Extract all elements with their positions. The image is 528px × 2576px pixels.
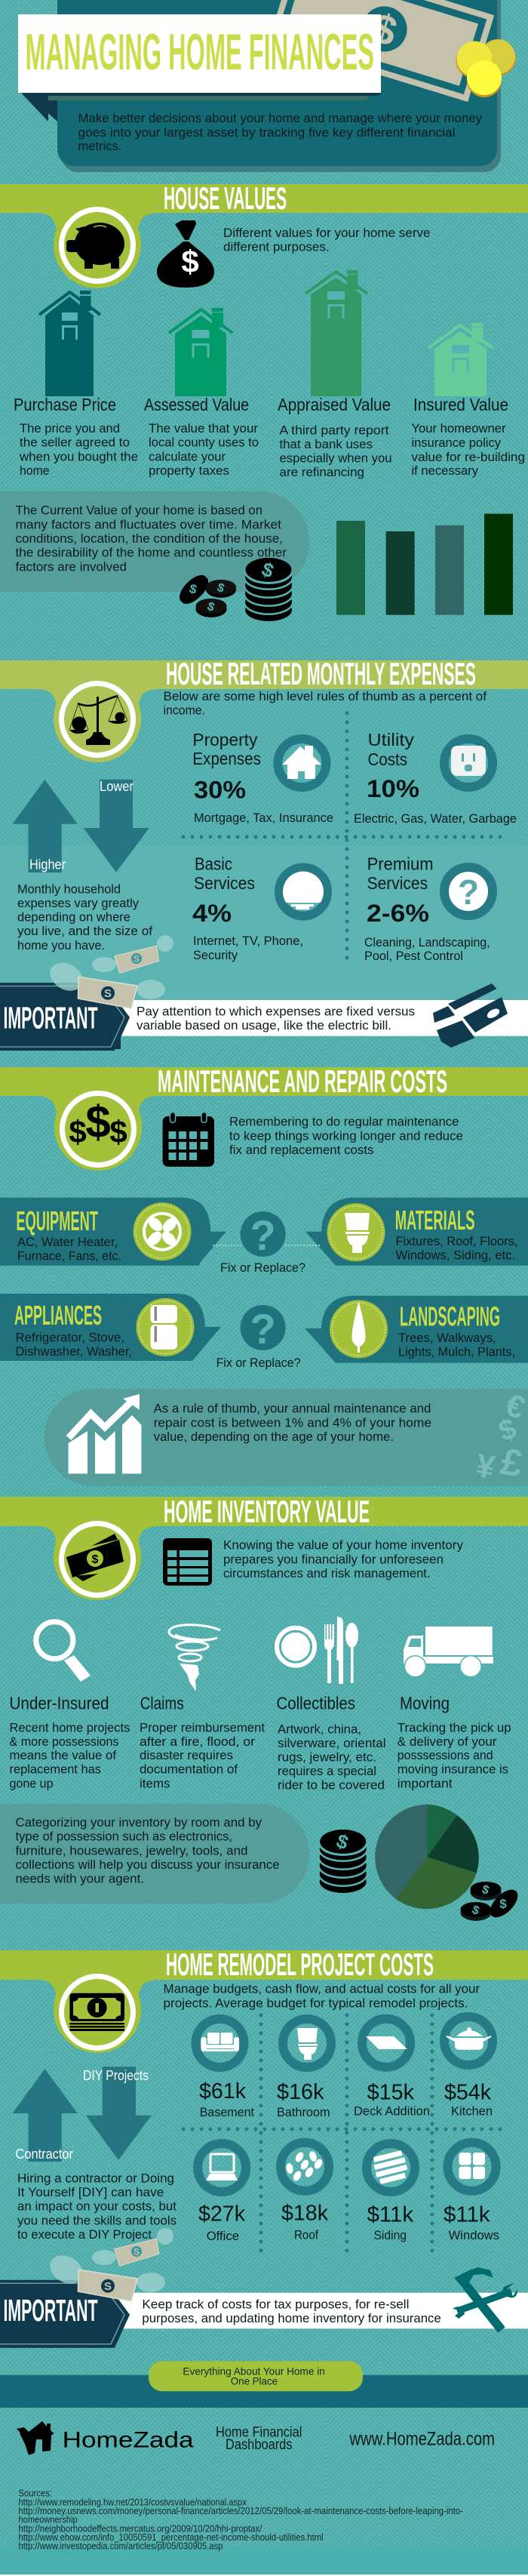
cost: siding: $11k bbox=[367, 2203, 414, 2227]
icon: flying money bbox=[45, 932, 177, 1008]
icon: dollar signs bbox=[69, 1097, 127, 1150]
text: contractor vs diy: to execute a DIY Project bbox=[17, 2227, 152, 2242]
panel: categorizing inventory: needs with your agent. bbox=[15, 1872, 144, 1886]
panel: rule of thumb: As a rule of thumb, your annual maintenance and bbox=[154, 1402, 431, 1416]
callout: important expenses bbox=[0, 983, 528, 1051]
cost: office: $27k bbox=[198, 2202, 245, 2227]
icon: deck bbox=[366, 2036, 407, 2049]
logo: HomeZada bbox=[17, 2421, 194, 2455]
expense: utility: 10% bbox=[367, 775, 419, 802]
icon: growth chart bbox=[69, 1394, 142, 1473]
panel: categorizing inventory: collections will help you discuss your insurance bbox=[15, 1857, 279, 1872]
icon: fan bbox=[133, 1202, 192, 1260]
intro text: inventory: Knowing the value of your home inventory bbox=[223, 1538, 463, 1553]
text: monthly expenses note bbox=[17, 882, 152, 953]
icon: tornado bbox=[169, 1625, 220, 1691]
sources: homeownership bbox=[18, 2515, 78, 2525]
callout: equipment: EQUIPMENT bbox=[16, 1205, 98, 1236]
column labels: inventory bbox=[9, 1693, 450, 1713]
icon: money bag: $ bbox=[181, 244, 199, 279]
icon: question mark: ? bbox=[458, 873, 479, 912]
arrow: higher: Higher bbox=[29, 857, 66, 873]
section band: maintenance bbox=[0, 1063, 528, 1171]
cost: roof: Roof bbox=[294, 2228, 318, 2242]
text: monthly expenses note: expenses vary greatly bbox=[17, 896, 139, 910]
intro text: maintenance: fix and replacement costs bbox=[229, 1143, 374, 1157]
column labels: Insured Value bbox=[413, 395, 508, 414]
icon: cash bbox=[66, 1534, 124, 1581]
column labels bbox=[14, 395, 508, 414]
sources: http://www.ehow.com/info_10050591_percentage-net-income-should-utilities.html bbox=[18, 2532, 324, 2543]
callout: materials: Fixtures, Roof, Floors, bbox=[395, 1234, 517, 1248]
text: moving: important bbox=[398, 1776, 453, 1790]
sources bbox=[18, 2488, 463, 2551]
cost: bathroom: $16k bbox=[277, 2080, 324, 2104]
intro text: inventory bbox=[223, 1538, 463, 1580]
text: contractor vs diy: Hiring a contractor or Doing bbox=[17, 2171, 174, 2186]
header description: goes into your largest asset by tracking five key different financial bbox=[78, 125, 456, 140]
icon: magnifier bbox=[36, 1622, 91, 1682]
text: assessed value bbox=[149, 421, 259, 478]
icon: monitor bbox=[279, 868, 327, 916]
cost: deck addition: $15k bbox=[367, 2081, 414, 2105]
intro text: inventory: circumstances and risk management. bbox=[223, 1566, 430, 1580]
text: assessed value: property taxes bbox=[149, 463, 229, 478]
intro text: remodel: Manage budgets, cash flow, and actual costs for all your bbox=[163, 1982, 480, 1996]
text: monthly expenses note: home you have. bbox=[17, 938, 105, 953]
text: collectibles: Artwork, china, bbox=[278, 1722, 361, 1737]
icon: sofa bbox=[201, 2033, 239, 2051]
panel: current value: many factors and fluctuates over time. Market bbox=[15, 517, 281, 531]
logo: HomeZada: HomeZada bbox=[63, 2428, 194, 2453]
text: purchase price: when you bought the bbox=[19, 450, 138, 464]
icon: wallet bbox=[433, 983, 508, 1048]
icon: flying money: S bbox=[134, 2246, 140, 2257]
text: appraised value: A third party report bbox=[279, 423, 389, 438]
panel: current value bbox=[0, 491, 309, 592]
text: insured value: insurance policy bbox=[412, 435, 501, 450]
text: insured value: Your homeowner bbox=[412, 421, 506, 435]
cost: windows: $11k bbox=[444, 2203, 490, 2227]
callout: important expenses: Pay attention to which expenses are fixed versus bbox=[137, 1005, 415, 1019]
icon: flying money bbox=[45, 2225, 177, 2301]
intro text: house values: Different values for your home serve bbox=[223, 226, 430, 240]
expense: property: Mortgage, Tax, Insurance bbox=[194, 811, 333, 825]
text: contractor vs diy: you need the skills and tools bbox=[17, 2213, 177, 2227]
intro text: expenses bbox=[163, 689, 487, 718]
panel: current value: conditions, location, the condition of the house, bbox=[15, 531, 283, 546]
text: moving: & delivery of your bbox=[398, 1734, 497, 1749]
header description: metrics. bbox=[78, 139, 122, 153]
expense: premium services: 2-6% bbox=[367, 900, 429, 927]
icon: currency symbols: £ bbox=[498, 1440, 526, 1485]
text: under-insured: replacement has bbox=[9, 1762, 101, 1777]
cost: bathroom bbox=[277, 2019, 331, 2119]
title ribbon bbox=[18, 14, 381, 122]
text: under-insured: & more possessions bbox=[9, 1734, 119, 1749]
icon: window panes bbox=[459, 2153, 485, 2179]
panel: rule of thumb: repair cost is between 1% and 4% of your home bbox=[154, 1415, 431, 1430]
text: claims: after a fire, flood, or bbox=[140, 1734, 255, 1749]
expense: property: Expenses bbox=[192, 749, 261, 768]
text: claims: Proper reimbursement bbox=[140, 1720, 265, 1734]
callout: landscaping bbox=[305, 1296, 528, 1363]
cost: windows bbox=[444, 2143, 499, 2242]
arrow: diy projects bbox=[83, 2067, 152, 2160]
icon: spreadsheet bbox=[163, 1538, 212, 1586]
icon: dollar signs: $ bbox=[69, 1114, 87, 1150]
sources: http://money.usnews.com/money/personal-finance/articles/2012/05/29/look-at-maintenance-costs-before-leaping-into- bbox=[18, 2506, 463, 2516]
intro text: expenses: income. bbox=[163, 703, 205, 718]
section band: house values: HOUSE VALUES bbox=[164, 180, 287, 216]
expense: premium services bbox=[364, 854, 493, 963]
text: under-insured: Recent home projects bbox=[9, 1720, 130, 1734]
icon: siding bbox=[372, 2150, 410, 2185]
icon: currency symbols bbox=[473, 1386, 528, 1487]
text: purchase price bbox=[19, 421, 138, 478]
arrow: contractor bbox=[12, 2069, 78, 2162]
callout: important remodel bbox=[0, 2267, 528, 2348]
expense: utility: Utility bbox=[368, 730, 415, 749]
icon: calendar bbox=[163, 1113, 214, 1167]
text: insured value bbox=[412, 421, 525, 478]
text: contractor vs diy bbox=[17, 2171, 177, 2242]
panel: rule of thumb: value, depending on the age of your home. bbox=[154, 1430, 394, 1444]
text: claims: disaster requires bbox=[140, 1748, 233, 1762]
text: moving: posssessions and bbox=[398, 1748, 493, 1762]
intro text: house values bbox=[223, 226, 430, 254]
cost: windows: Windows bbox=[449, 2228, 499, 2242]
text: home financial dashboards: Home Financial bbox=[216, 2425, 302, 2441]
column labels: Purchase Price bbox=[14, 395, 116, 414]
column labels: Assessed Value bbox=[144, 395, 249, 414]
cost: kitchen: Kitchen bbox=[451, 2104, 493, 2119]
callout: appliances: Dishwasher, Washer, bbox=[15, 1344, 132, 1359]
section band: inventory bbox=[0, 1494, 528, 1600]
panel: current value: the desirability of the home and countless other bbox=[15, 546, 287, 560]
callout: equipment: Furnace, Fans, etc. bbox=[17, 1249, 121, 1263]
icon: dollar signs: $ bbox=[109, 1114, 127, 1150]
icon: loose coins: $ bbox=[499, 1897, 507, 1911]
text: moving: Tracking the pick up bbox=[398, 1720, 511, 1734]
icon: laptop bbox=[206, 2154, 238, 2181]
arrow: lower: Lower bbox=[100, 779, 134, 794]
icon: coin stack bbox=[319, 1829, 367, 1893]
expense: basic services: 4% bbox=[192, 900, 232, 927]
panel: categorizing inventory bbox=[0, 1804, 309, 1904]
callout: important expenses: IMPORTANT bbox=[3, 1001, 98, 1036]
icon: shingles bbox=[285, 2150, 324, 2182]
arrow: diy projects: DIY Projects bbox=[83, 2068, 149, 2083]
icon: flying money: S bbox=[134, 954, 140, 965]
text: appraised value bbox=[279, 423, 392, 479]
footer band bbox=[0, 2375, 528, 2408]
arrow: higher bbox=[12, 780, 78, 873]
icon: tableware bbox=[277, 1617, 358, 1684]
icon: question mark bbox=[444, 867, 493, 916]
callout: equipment bbox=[0, 1198, 226, 1266]
text: collectibles: rugs, jewelry, etc. bbox=[278, 1750, 376, 1764]
expense: basic services bbox=[192, 854, 327, 962]
icon: banknote bbox=[269, 0, 494, 102]
intro text: maintenance bbox=[229, 1115, 463, 1157]
icon: piggy bank bbox=[66, 223, 124, 269]
label: fix or replace 1: Fix or Replace? bbox=[220, 1260, 305, 1275]
text: assessed value: calculate your bbox=[149, 450, 226, 464]
icon: coin stack bbox=[244, 557, 293, 621]
icon: loose coins bbox=[175, 571, 236, 617]
house: appraised value bbox=[305, 270, 367, 396]
text: claims: documentation of bbox=[140, 1762, 238, 1777]
panel: rule of thumb bbox=[45, 1386, 528, 1487]
icon: gold coins bbox=[456, 39, 516, 97]
intro text: inventory: prepares you financially for unforeseen bbox=[223, 1552, 444, 1566]
label: fix or replace 2: Fix or Replace? bbox=[216, 1356, 301, 1370]
callout: appliances bbox=[0, 1294, 221, 1361]
text: home financial dashboards: Dashboards bbox=[226, 2437, 293, 2453]
icon: hammer and wrench bbox=[453, 2267, 517, 2330]
icon: toilet bbox=[327, 1203, 385, 1261]
house: purchase price bbox=[39, 291, 100, 396]
cost: siding bbox=[367, 2144, 415, 2242]
icon: flying money: S bbox=[104, 2280, 112, 2293]
panel: current value: The Current Value of your home is based on bbox=[15, 503, 262, 518]
text: monthly expenses note: Monthly household bbox=[17, 882, 121, 896]
intro text: remodel bbox=[163, 1982, 480, 2010]
expense: basic services: Basic bbox=[195, 854, 232, 874]
callout: landscaping: Trees, Walkways, bbox=[398, 1331, 496, 1345]
cost: kitchen bbox=[444, 2017, 493, 2119]
icon: cash: $ bbox=[92, 1553, 99, 1566]
intro text: expenses: Below are some high level rules of thumb as a percent of bbox=[163, 689, 487, 703]
expense: basic services: Security bbox=[193, 948, 238, 962]
text: purchase price: home bbox=[20, 463, 50, 478]
icon: loose coins: $ bbox=[188, 581, 198, 597]
text: insured value: if necessary bbox=[412, 463, 478, 478]
text: purchase price: the seller agreed to bbox=[20, 435, 130, 450]
callout: materials: Windows, Siding, etc. bbox=[395, 1248, 515, 1263]
callout: appliances: APPLIANCES bbox=[14, 1300, 102, 1331]
sources: Sources: bbox=[18, 2488, 52, 2499]
icon: house bbox=[278, 739, 326, 787]
callout: equipment: AC, Water Heater, bbox=[17, 1235, 118, 1249]
arrow: contractor: Contractor bbox=[15, 2147, 73, 2162]
expense: property: Property bbox=[192, 730, 258, 749]
cost: deck addition bbox=[354, 2019, 430, 2119]
section band: monthly expenses bbox=[0, 656, 528, 762]
expense: premium services: Cleaning, Landscaping, bbox=[364, 935, 490, 949]
section band: remodel bbox=[0, 1947, 528, 2053]
cost: roof: $18k bbox=[281, 2202, 328, 2226]
expense: premium services: Services bbox=[367, 873, 428, 893]
icon: truck bbox=[404, 1627, 493, 1677]
expense: utility: Electric, Gas, Water, Garbage bbox=[354, 811, 517, 826]
text: appraised value: that a bank uses bbox=[279, 437, 373, 451]
text: assessed value: The value that your bbox=[149, 421, 258, 435]
cost: roof bbox=[281, 2143, 329, 2242]
header panel bbox=[57, 0, 516, 172]
tagline pill bbox=[149, 2361, 363, 2391]
icon: question circle 1 bbox=[213, 1211, 320, 1259]
icon: tree bbox=[330, 1300, 388, 1359]
icon: loose coins bbox=[460, 1882, 523, 1922]
tagline pill: Everything About Your Home in bbox=[183, 2365, 325, 2377]
header description bbox=[78, 111, 482, 153]
text: assessed value: local county uses to bbox=[149, 435, 259, 450]
header description: Make better decisions about your home and manage where your money bbox=[78, 111, 482, 125]
icon: loose coins: $ bbox=[205, 600, 216, 614]
expense: utility: Costs bbox=[368, 749, 407, 769]
icon: loose coins: $ bbox=[480, 1883, 491, 1897]
text: monthly expenses note: you live, and the size of bbox=[17, 924, 152, 938]
text: claims bbox=[140, 1720, 265, 1790]
icon: currency symbols: ¥ bbox=[473, 1447, 498, 1487]
icon: money stack bbox=[69, 1993, 124, 2031]
icon: banknote: $ bbox=[366, 3, 403, 56]
text: claims: items bbox=[140, 1776, 170, 1790]
sources: http://neighborhoodeffects.mercatus.org/2009/10/20/hhi-proptax/ bbox=[18, 2523, 262, 2534]
cost: deck addition: Deck Addition bbox=[354, 2104, 430, 2119]
icon: toilet bbox=[297, 2028, 318, 2060]
text: contractor vs diy: an impact on your costs, but bbox=[17, 2199, 177, 2214]
column labels: inventory: Under-Insured bbox=[9, 1693, 109, 1713]
cost: basement bbox=[196, 2019, 254, 2119]
column labels: inventory: Claims bbox=[140, 1693, 184, 1713]
text: under-insured bbox=[9, 1720, 130, 1790]
icon: flying money: S bbox=[104, 987, 112, 1000]
sources: http://www.investopedia.com/articles/pf/05/030905.asp bbox=[18, 2541, 223, 2551]
text: appraised value: are refinancing bbox=[279, 465, 364, 479]
icon: outlet bbox=[444, 739, 493, 787]
expense: premium services: Pool, Pest Control bbox=[364, 949, 463, 963]
expense: property bbox=[192, 730, 333, 825]
icon: loose coins: $ bbox=[215, 581, 226, 596]
icon: currency symbols: $ bbox=[495, 1413, 520, 1448]
icon: question circle 2: ? bbox=[250, 1305, 276, 1353]
panel: categorizing inventory: Categorizing your inventory by room and by bbox=[15, 1815, 262, 1830]
expense: premium services: Premium bbox=[367, 854, 434, 874]
text: contractor vs diy: It Yourself [DIY] can have bbox=[17, 2185, 164, 2199]
icon: balance scale bbox=[69, 696, 127, 745]
panel: current value: factors are involved bbox=[15, 559, 127, 574]
text: insured value: value for re-building bbox=[412, 450, 525, 464]
icon: dollar signs: $ bbox=[85, 1097, 111, 1147]
intro text: maintenance: Remembering to do regular maintenance bbox=[229, 1115, 459, 1129]
panel: categorizing inventory: furniture, housewares, jewelry, tools, and bbox=[15, 1843, 247, 1857]
text: home financial dashboards bbox=[216, 2425, 302, 2453]
text: collectibles bbox=[278, 1722, 386, 1793]
text: monthly expenses note: depending on where bbox=[17, 910, 130, 925]
text: under-insured: means the value of bbox=[9, 1748, 116, 1762]
text: collectibles: rider to be covered bbox=[278, 1778, 385, 1793]
callout: important remodel: IMPORTANT bbox=[3, 2293, 98, 2328]
text: purchase price: The price you and bbox=[20, 421, 120, 435]
cost: office bbox=[198, 2144, 246, 2243]
cost: kitchen: $54k bbox=[444, 2081, 491, 2105]
callout: important remodel: Keep track of costs for tax purposes, for re-sell bbox=[142, 2297, 409, 2311]
expense: utility bbox=[354, 730, 517, 826]
tagline pill: One Place bbox=[231, 2374, 278, 2387]
section band: house values bbox=[0, 180, 528, 288]
icon: question circle 2 bbox=[241, 1305, 286, 1353]
panel: categorizing inventory: type of possession such as electronics, bbox=[15, 1830, 232, 1844]
sources: http://www.remodeling.hw.net/2013/costvsvalue/national.aspx bbox=[18, 2497, 247, 2507]
icon: pot bbox=[447, 2027, 491, 2050]
icon: refrigerator bbox=[136, 1298, 195, 1356]
bar chart bbox=[336, 514, 513, 615]
cost: siding: Siding bbox=[374, 2228, 407, 2242]
column labels: inventory: Moving bbox=[400, 1693, 450, 1713]
arrow: lower bbox=[84, 779, 149, 873]
expense: basic services: Services bbox=[194, 873, 255, 893]
cost: basement: Basement bbox=[200, 2105, 254, 2119]
text: website: www.HomeZada.com bbox=[349, 2428, 495, 2449]
text: moving bbox=[398, 1720, 511, 1790]
icon: question circle 1: ? bbox=[250, 1211, 276, 1259]
icon: money bag bbox=[157, 220, 214, 288]
text: appraised value: especially when you bbox=[279, 451, 392, 466]
house: insured value bbox=[428, 323, 493, 396]
house: assessed value bbox=[169, 308, 232, 396]
cost: office: Office bbox=[207, 2229, 239, 2243]
callout: landscaping: Lights, Mulch, Plants, bbox=[398, 1345, 515, 1359]
text: under-insured: gone up bbox=[9, 1776, 53, 1790]
callout: important expenses: variable based on usage, like the electric bill. bbox=[137, 1018, 391, 1033]
intro text: maintenance: to keep things working longer and reduce bbox=[229, 1128, 463, 1143]
cost: bathroom: Bathroom bbox=[277, 2105, 330, 2119]
icon: coin stack: $ bbox=[333, 1829, 351, 1854]
text: collectibles: requires a special bbox=[278, 1764, 376, 1778]
icon: coin stack: $ bbox=[259, 557, 277, 583]
column labels: inventory: Collectibles bbox=[276, 1693, 355, 1713]
intro text: house values: different purposes. bbox=[223, 240, 330, 254]
callout: important remodel: purposes, and updating home inventory for insurance bbox=[142, 2311, 441, 2325]
callout: appliances: Refrigerator, Stove, bbox=[15, 1330, 124, 1344]
chart: house value columns bbox=[39, 270, 493, 396]
text: moving: moving insurance is bbox=[398, 1762, 508, 1777]
icon: loose coins: $ bbox=[470, 1904, 481, 1918]
intro text: remodel: projects. Average budget for typical remodel projects. bbox=[163, 1996, 468, 2010]
expense: basic services: Internet, TV, Phone, bbox=[193, 934, 303, 948]
column labels: Appraised Value bbox=[278, 395, 391, 414]
expense: property: 30% bbox=[194, 777, 246, 804]
text: collectibles: silverware, oriental bbox=[278, 1736, 386, 1750]
callout: materials bbox=[305, 1198, 528, 1266]
pie chart bbox=[375, 1805, 479, 1909]
cost: basement: $61k bbox=[199, 2079, 246, 2104]
